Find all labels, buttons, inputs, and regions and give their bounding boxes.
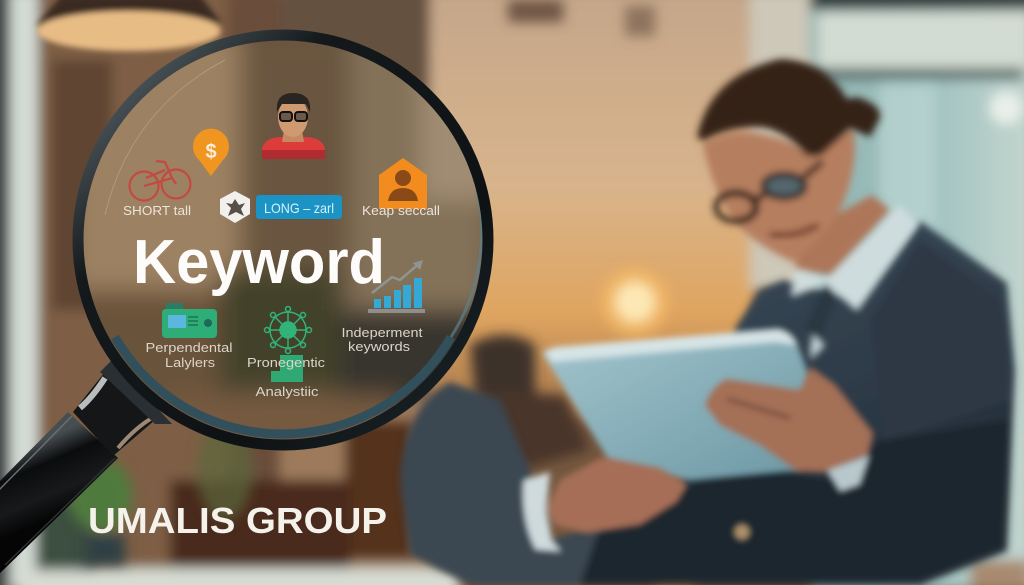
label: Independent keywords: keywords [348,339,411,354]
icon: person with glasses [262,93,325,159]
label: Pronegentic: Pronegentic [247,355,326,370]
magnifying glass [0,30,500,578]
lens rim [78,35,488,445]
icon: orange house with person [379,158,427,209]
label: Perpendental Lalylers: Perpendental [146,340,233,355]
label: Independent keywords [342,325,423,354]
label: Perpendental Lalylers: Lalylers [165,355,216,370]
tablet [543,329,815,480]
brand: UMALIS GROUP: UMALIS GROUP [88,500,387,541]
icon: dollar pin [193,129,229,176]
hands [522,367,873,552]
neck and head [703,127,890,275]
handle [0,360,172,578]
jacket [400,221,1015,585]
glasses [716,162,822,221]
heading: Keyword: Keyword [133,228,385,297]
mouth [770,225,818,236]
icon: growth bar chart [368,260,425,313]
label: LONG pill [256,195,342,219]
icon: green blocks [271,355,303,382]
icon: red bicycle [130,161,190,200]
label: Analystiic: Analystiic [256,384,319,399]
ceiling lamp [36,0,222,51]
shirt and tie [791,205,918,360]
background chair [470,335,590,470]
label: SHORT tail: SHORT tall [123,203,191,218]
icon: white hexagon star [220,191,250,223]
label: Independent keywords: Indeperment [342,325,423,340]
icon: dollar pin: $ [205,141,217,163]
label: Keap seccall: Keap seccall [362,203,440,218]
label: LONG pill: LONG – zarl [264,200,334,216]
label: Perpendental Lalylers [146,340,233,370]
lens glass with magnified background [84,42,482,440]
icon: green device [162,303,217,338]
coat button [734,524,750,540]
hair [697,59,880,155]
businessperson holding a tablet [400,59,1015,585]
icon: green network wheel [264,306,312,354]
